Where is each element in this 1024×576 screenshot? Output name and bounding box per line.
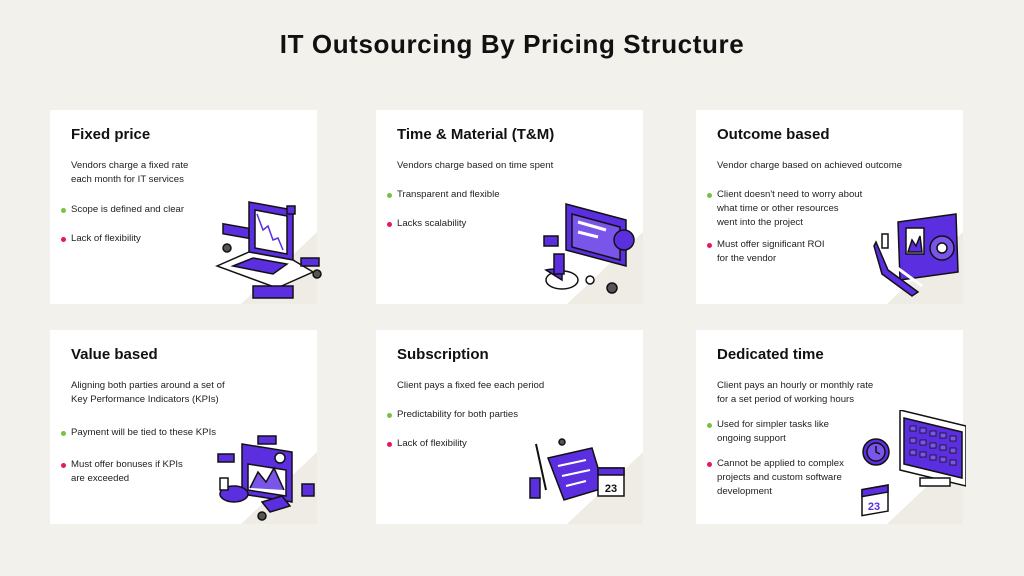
description [71,382,225,404]
heading: Subscription [397,346,489,363]
pro bullet: Transparent and flexible [397,189,500,200]
description: for a set period of working hours [717,394,854,405]
panel: time and material [376,110,643,304]
title: IT Outsourcing By Pricing Structure [280,29,744,59]
panel: dedicated time [696,330,963,524]
heading: Dedicated time [717,346,824,363]
con bullet [61,460,182,481]
description: Vendor charge based on achieved outcome [717,160,902,171]
con bullet [707,240,824,261]
con bullet: Must offer significant ROI [717,239,825,250]
icon: subscription contract: 23 [605,483,617,495]
description: Vendors charge based on time spent [397,160,553,171]
description [71,162,188,182]
icon: calendar monitor and clock [861,410,966,516]
panel: fixed price [50,110,317,304]
panel: value based [50,330,317,524]
heading: Time & Material (T&M) [397,126,554,143]
pro bullet [707,190,862,227]
pro bullet: Client doesn't need to worry about [717,189,862,200]
card corners [224,202,960,510]
con bullet [707,460,844,496]
panel: subscription [376,330,643,524]
description: Key Performance Indicators (KPIs) [71,394,219,405]
heading: Fixed price [71,126,150,143]
pro bullet: Payment will be tied to these KPIs [71,427,216,438]
description: Vendors charge a fixed rate [71,160,188,171]
con bullet: for the vendor [717,253,776,264]
icon: subscription contract [529,438,625,501]
con bullet: Cannot be applied to complex [717,458,844,469]
con bullet: are exceeded [71,473,129,484]
pro bullet: went into the project [717,217,803,228]
description: Client pays an hourly or monthly rate [717,380,873,391]
pro bullet [707,420,828,443]
description: Client pays a fixed fee each period [397,380,544,391]
con bullet [387,220,466,228]
con bullet: Lack of flexibility [397,438,467,449]
con bullet: development [717,486,772,497]
con bullet: Must offer bonuses if KPIs [71,459,183,470]
pro bullet: Scope is defined and clear [71,204,184,215]
icon: calendar monitor and clock: 23 [868,501,880,513]
pro bullet: ongoing support [717,433,786,444]
icon: kpi analytics [217,435,315,521]
heading: Value based [71,346,158,363]
icon: monitor and pie chart [543,203,635,294]
description [717,382,873,404]
con bullet: projects and custom software [717,472,842,483]
pro bullet: what time or other resources [717,203,839,214]
con bullet: Lack of flexibility [71,233,141,244]
panel: outcome based [696,110,963,304]
pro bullet: Predictability for both parties [397,409,518,420]
heading: Outcome based [717,126,830,143]
con bullet: Lacks scalability [397,218,466,229]
icon: laptop with money [215,201,322,299]
description: Aligning both parties around a set of [71,380,225,391]
con bullet [61,234,141,243]
description: each month for IT services [71,174,184,185]
icon: dashboard [873,213,959,297]
con bullet [387,440,467,448]
pro bullet: Used for simpler tasks like [717,419,829,430]
